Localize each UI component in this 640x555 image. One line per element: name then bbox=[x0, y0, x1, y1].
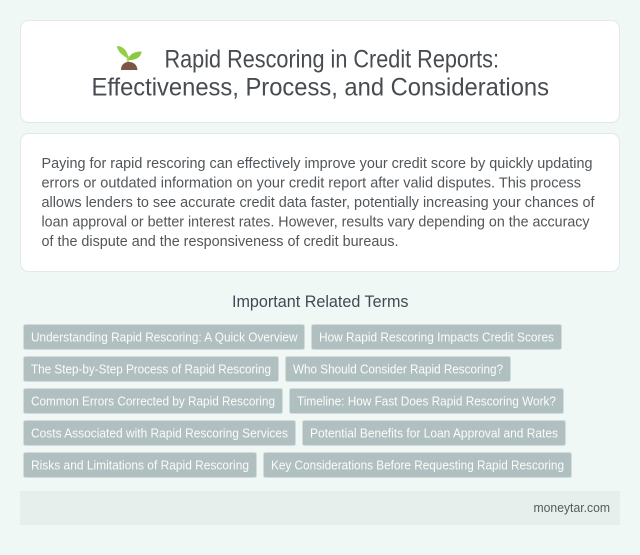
paragraph text bbox=[42, 155, 595, 250]
paragraph text: loan approval or better interest rates. However, results vary depending on the accuracy bbox=[42, 214, 590, 230]
paragraph text: of the dispute and the responsiveness of credit bureaus. bbox=[42, 233, 398, 250]
tag: costs bbox=[24, 420, 296, 446]
tag: key considerations bbox=[264, 452, 572, 478]
icon: seedling bbox=[117, 46, 142, 70]
title text: Effectiveness, Process, and Considerations bbox=[92, 74, 549, 102]
tag: common errors: Common Errors Corrected by Rapid Rescoring bbox=[31, 394, 275, 408]
panel: title card bbox=[20, 20, 620, 122]
footer source text: moneytar.com bbox=[534, 500, 610, 515]
tag: credit score impact bbox=[312, 324, 562, 350]
tag: potential benefits: Potential Benefits for Loan Approval and Rates bbox=[310, 426, 558, 440]
tag: step-by-step process bbox=[24, 356, 278, 382]
tag: common errors bbox=[24, 388, 282, 414]
tag: understanding rapid rescoring bbox=[24, 324, 304, 350]
tag: key considerations: Key Considerations Before Requesting Rapid Rescoring bbox=[271, 458, 564, 472]
tag: who should consider: Who Should Consider Rapid Rescoring? bbox=[293, 362, 503, 376]
title text bbox=[92, 46, 549, 102]
tag: credit score impact: How Rapid Rescoring Impacts Credit Scores bbox=[319, 330, 554, 344]
tag: understanding rapid rescoring: Understanding Rapid Rescoring: A Quick Overview bbox=[31, 330, 298, 344]
paragraph text: Paying for rapid rescoring can effectively improve your credit score by quickly updating bbox=[42, 155, 592, 172]
paragraph text: errors or outdated information on your credit report after valid disputes. This process bbox=[42, 174, 581, 192]
tag: step-by-step process: The Step-by-Step Process of Rapid Rescoring bbox=[31, 362, 271, 376]
tag: risks and limitations bbox=[24, 452, 256, 478]
tag: who should consider bbox=[286, 356, 510, 382]
tag: costs: Costs Associated with Rapid Rescoring Services bbox=[31, 426, 288, 440]
tag: timeline: Timeline: How Fast Does Rapid Rescoring Work? bbox=[297, 394, 556, 408]
tag: timeline bbox=[290, 388, 564, 414]
panel: summary paragraph bbox=[20, 134, 620, 272]
tag: risks and limitations: Risks and Limitations of Rapid Rescoring bbox=[31, 458, 249, 472]
heading: important related terms: Important Related Terms bbox=[232, 293, 408, 311]
title text: Rapid Rescoring in Credit Reports: bbox=[164, 46, 499, 74]
paragraph text: allows lenders to see accurate credit data faster, potentially increasing your chances of bbox=[42, 194, 595, 211]
footer bar bbox=[20, 491, 620, 525]
tag list bbox=[24, 324, 572, 478]
tag: potential benefits bbox=[302, 420, 566, 446]
